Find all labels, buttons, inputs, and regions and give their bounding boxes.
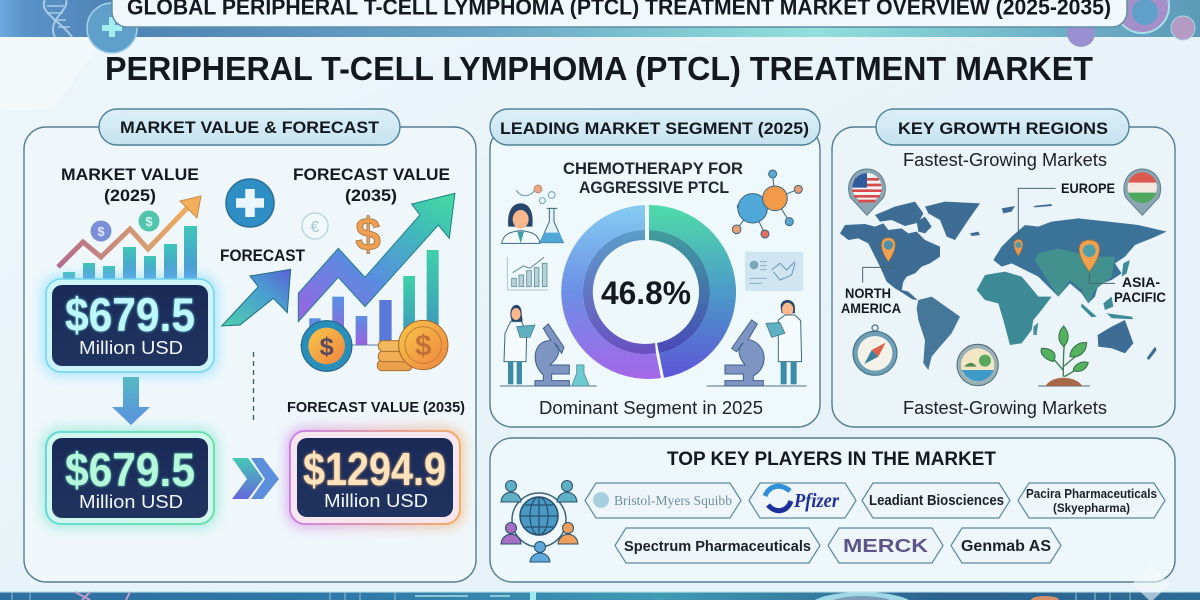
logo: Genmab AS: Genmab AS — [961, 538, 1051, 555]
logo: Pfizer: Pfizer — [793, 490, 839, 512]
pin: North America — [881, 238, 895, 262]
light corner facet — [0, 37, 105, 110]
logo: Pfizer — [749, 483, 856, 518]
donut chart — [561, 205, 736, 379]
logo: Pacira Pharmaceuticals — [1018, 483, 1165, 518]
segment name — [563, 159, 743, 197]
label: Asia-Pacific: PACIFIC — [1114, 289, 1166, 305]
arrow: forecast — [222, 269, 291, 326]
logo: Pacira Pharmaceuticals: (Skyepharma) — [1053, 501, 1130, 515]
label: Asia-Pacific: ASIA- — [1122, 274, 1160, 290]
logo: Genmab AS — [951, 528, 1061, 563]
label: forecast value 2035: FORECAST VALUE — [293, 165, 450, 184]
value box: forecast value 2035: Million USD — [324, 491, 428, 511]
icon: DNA helix — [44, 0, 72, 37]
value box: second market value — [42, 428, 218, 528]
donut value: 46.8% — [601, 275, 691, 311]
value box: market value 2025 — [42, 275, 218, 376]
panel: market value and forecast — [24, 109, 476, 582]
icon: landscape badge — [957, 344, 998, 386]
pin: Asia-Pacific — [1079, 240, 1099, 272]
panel: top key players — [490, 438, 1175, 582]
icon: compass — [853, 325, 897, 375]
world map — [840, 188, 1167, 370]
icon: global network — [501, 480, 578, 562]
icon: mini bar chart — [507, 257, 548, 290]
panel: key growth regions — [832, 109, 1175, 427]
label: forecast value 2035 — [293, 165, 450, 205]
arrow: down — [112, 377, 150, 425]
caption: dominant segment: Dominant Segment in 2025 — [539, 398, 763, 418]
arrow: double chevron — [232, 458, 279, 499]
icon: scientist and microscope right — [707, 300, 807, 386]
logo: Merck — [828, 528, 943, 563]
icon: scientist and microscope left — [500, 305, 597, 386]
label: Europe: EUROPE — [1061, 180, 1115, 196]
label: market value 2025: MARKET VALUE — [61, 165, 199, 184]
chart: forecast growth — [298, 193, 455, 345]
chart: small growth bars — [58, 196, 201, 280]
caption: fastest-growing top: Fastest-Growing Markets — [903, 150, 1107, 170]
segment name: CHEMOTHERAPY FOR — [563, 159, 743, 178]
icon: Hungary flag pin — [1124, 169, 1161, 215]
logo: Spectrum Pharmaceuticals — [615, 528, 820, 563]
icon: euro bubble: € — [311, 219, 320, 236]
segment name: AGGRESSIVE PTCL — [579, 178, 729, 197]
label: Europe connector — [1018, 188, 1056, 240]
panel heading — [99, 109, 400, 145]
logo: Spectrum Pharmaceuticals: Spectrum Pharmaceuticals — [624, 538, 811, 555]
icon: medical plus — [87, 3, 137, 53]
label: forecast value 2035 lower: FORECAST VALUE (2035) — [287, 399, 465, 416]
icon: teal dollar coin: $ — [145, 214, 153, 229]
bottom decorative band — [0, 591, 1200, 600]
label: North America: AMERICA — [841, 300, 901, 316]
panel heading: LEADING MARKET SEGMENT (2025) — [500, 119, 809, 138]
main title: PERIPHERAL T-CELL LYMPHOMA (PTCL) TREATMENT MARKET — [105, 50, 1093, 87]
logo: Bristol-Myers Squibb: Bristol-Myers Squibb — [614, 494, 732, 509]
icon: cells — [1067, 0, 1195, 47]
value box: forecast value 2035: $1294.9 — [303, 443, 446, 495]
icon: coins: $ — [320, 333, 334, 361]
icon: coins — [301, 320, 448, 371]
value box: second market value: $679.5 — [65, 443, 195, 496]
icon: US flag pin — [849, 169, 885, 215]
icon: data screen — [745, 252, 803, 291]
caption: fastest-growing bottom: Fastest-Growing Markets — [903, 398, 1107, 418]
pin: Europe — [1014, 239, 1023, 256]
value box: second market value: Million USD — [79, 492, 183, 512]
label: North America — [841, 285, 901, 316]
label: forecast: FORECAST — [220, 246, 306, 265]
value box: forecast value 2035: $1294.9 — [303, 443, 446, 495]
heading: top key players: TOP KEY PLAYERS IN THE MARKET — [667, 449, 996, 470]
panel: leading market segment — [490, 109, 820, 427]
icon: teal dollar coin — [138, 210, 160, 232]
icon: sparkle — [1132, 565, 1170, 600]
label: North America: NORTH — [845, 285, 891, 301]
panel heading — [490, 109, 820, 145]
panel heading: MARKET VALUE & FORECAST — [120, 118, 380, 137]
icon: researcher with flask — [502, 185, 563, 243]
value box: forecast value 2035 — [286, 427, 464, 528]
icon: euro bubble — [302, 213, 328, 239]
icon: molecule — [732, 170, 802, 238]
divider: dashed connector — [252, 352, 254, 423]
value box: market value 2025: $679.5 — [65, 288, 195, 341]
icon: sprout — [1038, 326, 1090, 386]
logo: Merck: MERCK — [843, 536, 928, 556]
icon: plus badge — [226, 179, 274, 227]
logo: Leadiant Biosciences — [862, 483, 1010, 518]
value box: second market value: $679.5 — [65, 443, 195, 496]
label: forecast value 2035: (2035) — [345, 186, 397, 205]
icon: purple dollar coin — [90, 220, 112, 242]
label: Asia-Pacific — [1114, 274, 1166, 305]
icon: orange dollar: $ — [355, 208, 381, 260]
header banner — [0, 0, 1200, 53]
value box: market value 2025: Million USD — [79, 338, 183, 358]
logo: Bristol-Myers Squibb — [585, 483, 741, 518]
label: market value 2025 — [61, 165, 199, 205]
icon: coins: $ — [415, 330, 431, 363]
panel heading: KEY GROWTH REGIONS — [898, 119, 1108, 138]
logo: Pacira Pharmaceuticals: Pacira Pharmaceuticals — [1026, 487, 1157, 501]
label: market value 2025: (2025) — [104, 186, 156, 205]
value box: market value 2025: $679.5 — [65, 288, 195, 341]
panel heading — [876, 109, 1129, 145]
logo: Leadiant Biosciences: Leadiant Biosciences — [869, 493, 1004, 509]
icon: purple dollar coin: $ — [97, 224, 105, 239]
